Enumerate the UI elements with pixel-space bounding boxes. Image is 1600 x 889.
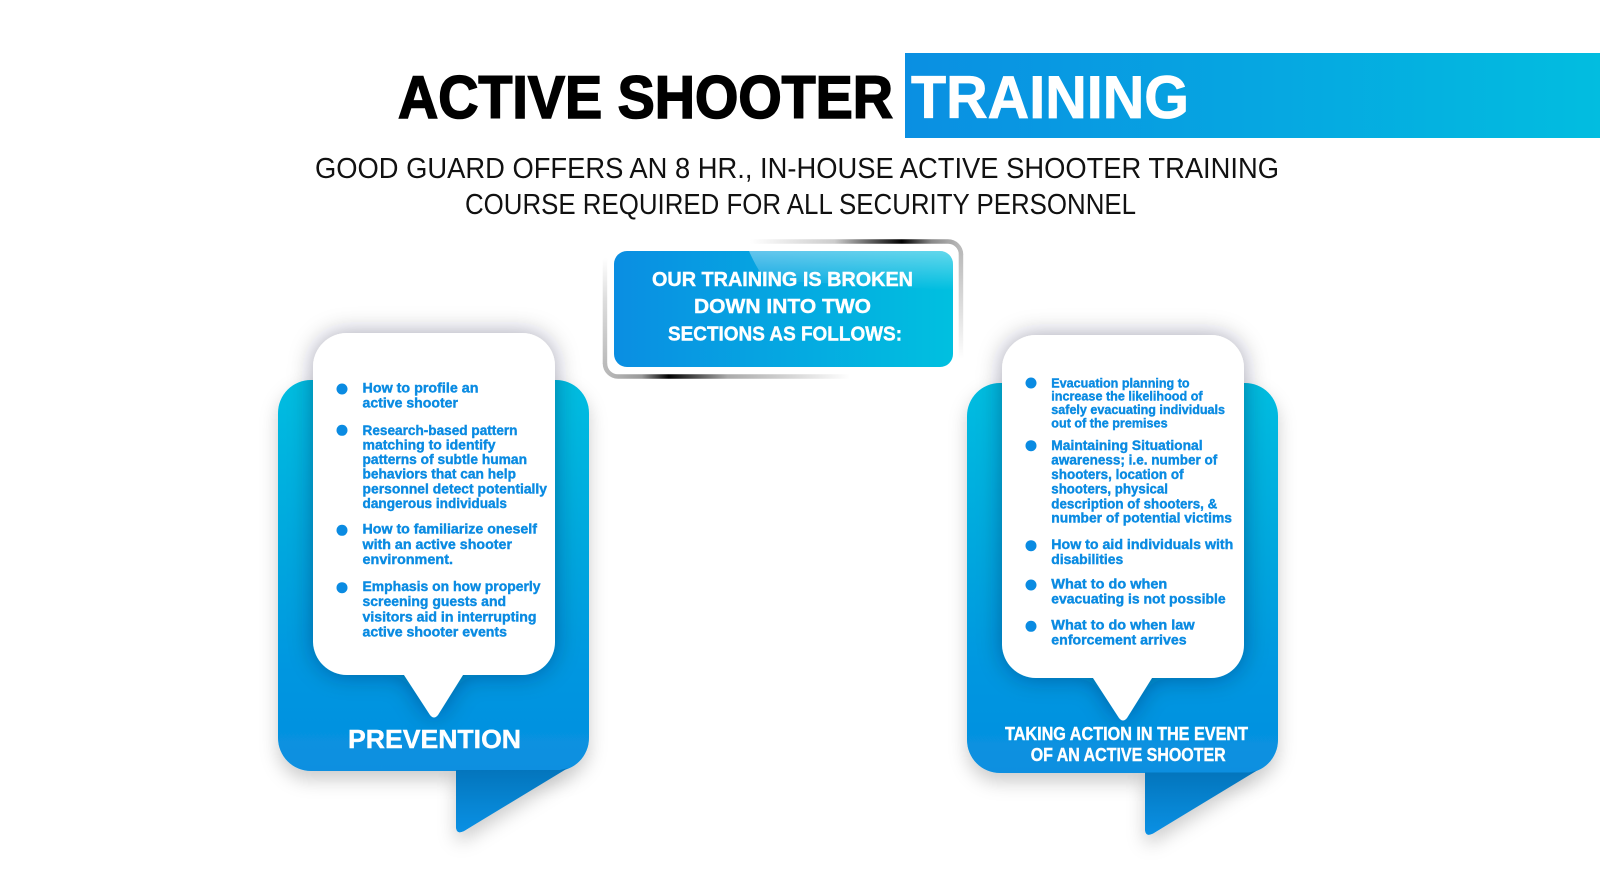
card body	[967, 383, 1278, 773]
white speech bubble	[313, 333, 555, 718]
card tail	[1145, 768, 1259, 835]
taking action heading: OF AN ACTIVE SHOOTER	[1031, 745, 1226, 765]
list: prevention items: patterns of subtle human	[362, 451, 527, 467]
panel: prevention	[278, 333, 589, 832]
callout text	[652, 269, 913, 346]
list: taking action items: Maintaining Situational	[1051, 437, 1203, 453]
list: taking action items: out of the premises	[1051, 415, 1168, 430]
list: taking action items	[1026, 375, 1233, 648]
list: taking action items: What to do when	[1051, 575, 1167, 591]
white speech bubble	[1002, 335, 1244, 720]
callout text: SECTIONS AS FOLLOWS:	[668, 324, 902, 346]
list: prevention items: Research-based pattern	[362, 422, 518, 438]
title: training: TRAINING	[911, 64, 1189, 131]
taking action heading	[1005, 724, 1248, 765]
list: prevention items: matching to identify	[362, 437, 496, 453]
intro callout box	[603, 242, 963, 376]
list: taking action items: number of potential victims	[1051, 510, 1232, 526]
list: taking action items: shooters, location of	[1051, 466, 1184, 482]
list: taking action items: enforcement arrives	[1051, 632, 1187, 648]
panel: taking action	[967, 335, 1278, 835]
list: prevention items: Emphasis on how properly	[362, 578, 541, 594]
list: prevention items: active shooter	[362, 395, 459, 411]
card tail	[456, 765, 570, 832]
callout text: DOWN INTO TWO	[694, 296, 871, 318]
list: prevention items: How to familiarize oneself	[362, 521, 537, 537]
title banner	[905, 53, 1600, 138]
list: taking action items: safely evacuating individuals	[1051, 402, 1225, 417]
list: prevention items: active shooter events	[362, 623, 507, 639]
list: taking action items: awareness; i.e. number of	[1051, 451, 1218, 467]
list: prevention items: environment.	[362, 551, 453, 567]
list: prevention items: screening guests and	[362, 593, 506, 609]
list: prevention items: behaviors that can help	[362, 466, 516, 482]
list: prevention items: visitors aid in interrupting	[362, 608, 536, 624]
subtitle: COURSE REQUIRED FOR ALL SECURITY PERSONNEL	[465, 189, 1136, 221]
list: prevention items: How to profile an	[362, 380, 478, 396]
prevention heading: PREVENTION	[348, 724, 521, 754]
card body	[278, 380, 589, 771]
list: taking action items: shooters, physical	[1051, 480, 1168, 496]
list: prevention items: personnel detect potentially	[362, 480, 547, 496]
subtitle: GOOD GUARD OFFERS AN 8 HR., IN-HOUSE ACTIVE SHOOTER TRAINING	[315, 153, 1279, 185]
subtitle	[315, 153, 1279, 221]
callout text: OUR TRAINING IS BROKEN	[652, 269, 913, 291]
list: taking action items: increase the likelihood of	[1051, 389, 1203, 404]
title: active shooter: ACTIVE SHOOTER	[398, 64, 893, 131]
list: taking action items: What to do when law	[1051, 617, 1195, 633]
list: taking action items: evacuating is not possible	[1051, 590, 1226, 606]
list: taking action items: How to aid individuals with	[1051, 536, 1233, 552]
list: taking action items: disabilities	[1051, 551, 1124, 567]
list: prevention items: dangerous individuals	[362, 495, 507, 511]
title	[398, 53, 1600, 138]
list: prevention items: with an active shooter	[361, 536, 513, 552]
taking action heading: TAKING ACTION IN THE EVENT	[1005, 724, 1248, 744]
list: taking action items: Evacuation planning to	[1051, 375, 1190, 390]
list: prevention items	[336, 380, 547, 639]
list: taking action items: description of shooters, &	[1051, 495, 1217, 511]
